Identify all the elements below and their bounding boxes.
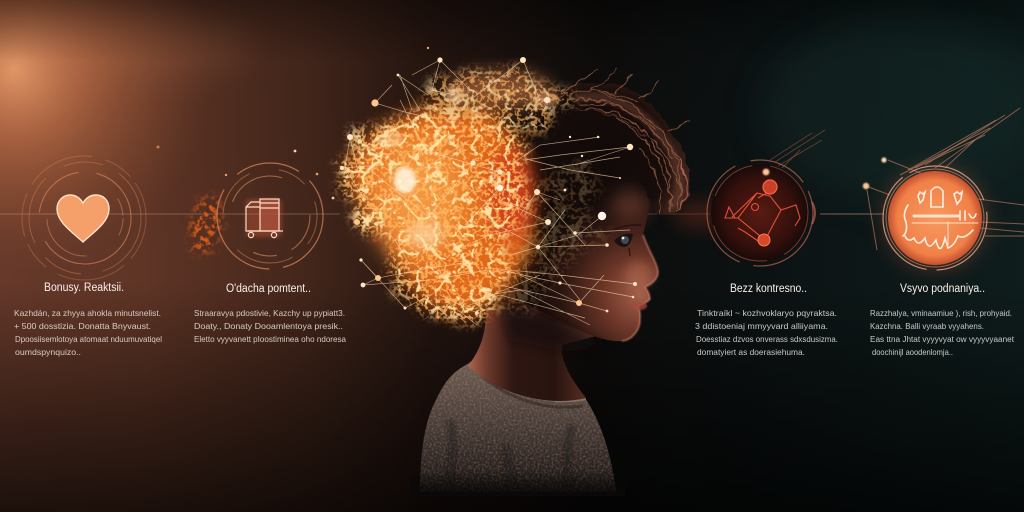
- icon: network diagram disc: [674, 130, 825, 266]
- jaw shadow: [500, 300, 612, 352]
- face rim highlight: [622, 235, 658, 341]
- orange dust patch: [156, 146, 334, 259]
- diagram: [725, 190, 800, 241]
- heading: Vsyvo podnaniya..: [900, 283, 985, 295]
- body copy: Dpoosiisemlotoya atomaat nduumuvatiqel: [15, 334, 162, 344]
- body copy: [870, 308, 1015, 357]
- network cluster: [329, 46, 637, 333]
- body copy: Kazhdán, za zhyya ahokla minutsnelist.: [14, 308, 161, 318]
- neck: [468, 280, 600, 401]
- body copy: Tinktraíkl ~ kozhvoklaryo pqyraktsa.: [697, 308, 837, 318]
- forehead light: [612, 189, 648, 221]
- body copy: [194, 308, 346, 344]
- body copy: Eas ttna Jhtat vyyyvyat ow vyyyvyaanet: [870, 334, 1015, 344]
- body copy: 3 ddistoeniaj mmyyvard alliiyama.: [695, 321, 828, 331]
- icon: glowing scribble disc: [863, 108, 1024, 272]
- body copy: Eletto vyyvanett pIoostiminea oho ndoresa: [194, 334, 346, 344]
- body copy: doochinijl aoodenlomja..: [872, 347, 953, 357]
- body copy: Razzhalya, vminaamiue ), rish, prohyaid.: [870, 308, 1012, 318]
- shirt: [420, 362, 616, 492]
- text block: Bonusy. Reaktsii.: [14, 282, 162, 357]
- body copy: Kazchna. Balli vyraab vyyahens.: [870, 321, 984, 331]
- hair: [525, 68, 690, 215]
- body copy: [695, 308, 838, 357]
- body copy: domatyiert as doerasiehuma.: [697, 347, 805, 357]
- text block: Bezz kontresno..: [695, 283, 838, 357]
- icon: cart with boxes in rings: [217, 163, 323, 269]
- scribbles: [903, 187, 978, 249]
- hair outer glow band: [575, 96, 679, 208]
- eye: [612, 225, 641, 256]
- horizontal connector line: [0, 213, 884, 215]
- icon: heart in rings: [22, 156, 146, 280]
- body copy: oumdspynquizo..: [15, 347, 81, 357]
- body copy: Doaty., Donaty Dooamlentoya presik..: [194, 321, 343, 331]
- body copy: Doesstiaz dzvos onverass sdxsdusizma.: [696, 334, 838, 344]
- heading: Bezz kontresno..: [730, 283, 807, 295]
- cart: [246, 199, 283, 238]
- body copy: [14, 308, 162, 357]
- child portrait: [329, 46, 691, 492]
- text block: O'dacha pomtent..: [194, 283, 346, 344]
- heading: O'dacha pomtent..: [226, 283, 311, 295]
- text block: Vsyvo podnaniya..: [870, 283, 1015, 357]
- face: [500, 120, 658, 341]
- heading: Bonusy. Reaktsii.: [44, 282, 124, 294]
- heart: [57, 195, 109, 242]
- body copy: + 500 dosstizia. Donatta Bnyvaust.: [14, 321, 151, 331]
- body copy: Straaravya pdostivie, Kazchy up pypiatt3.: [194, 308, 345, 318]
- glowing nodes: [340, 47, 637, 319]
- connection lines: [342, 60, 635, 325]
